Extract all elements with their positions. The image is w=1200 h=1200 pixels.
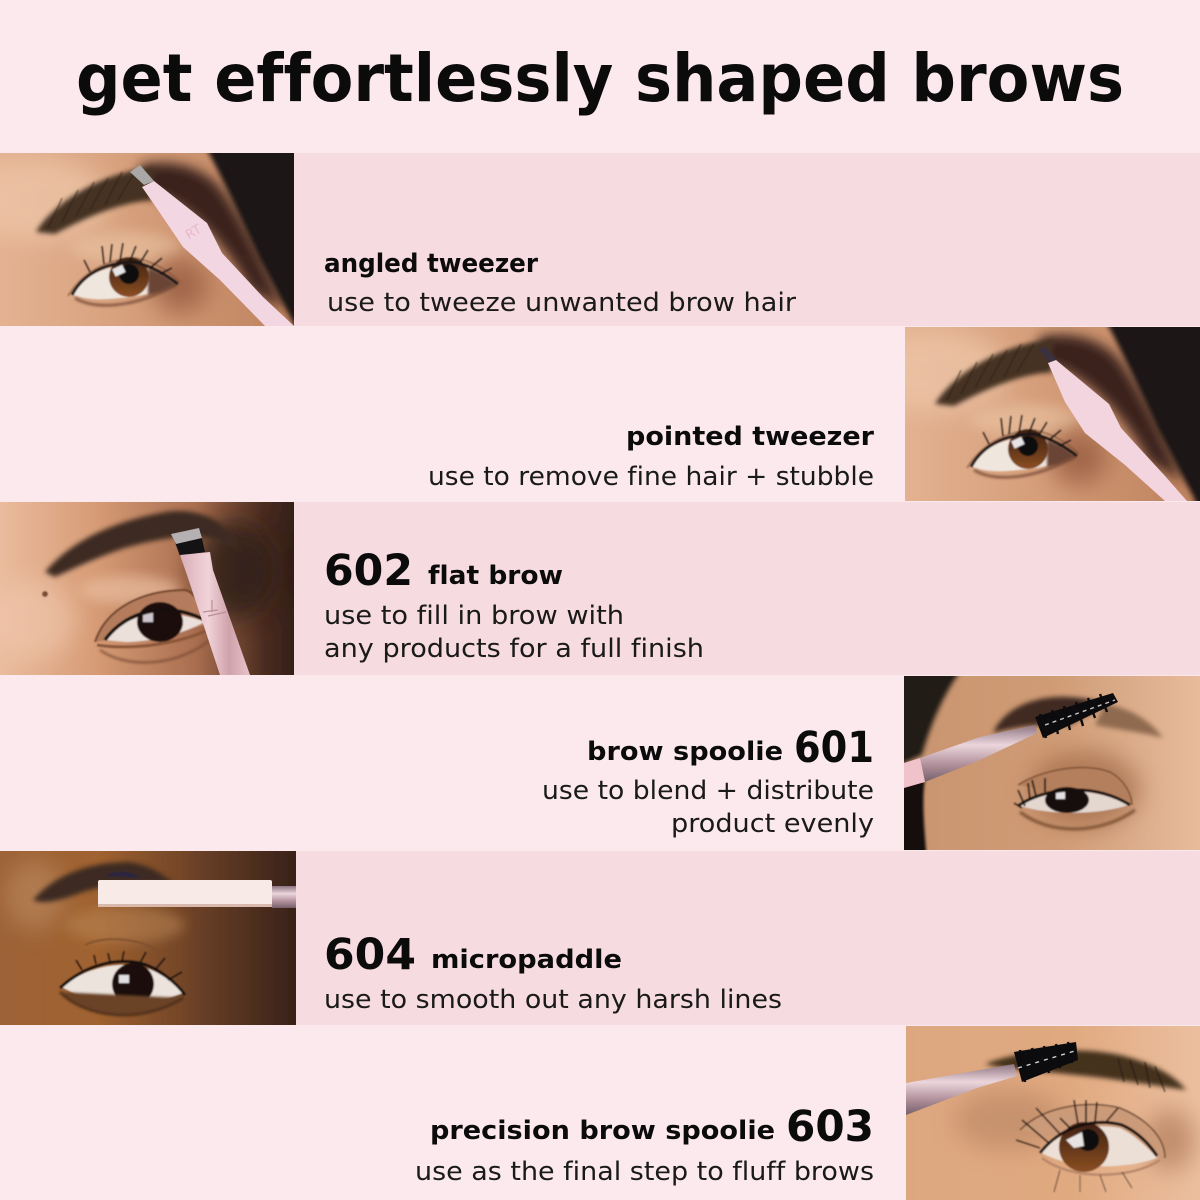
text: brow spoolie 601: 601 — [794, 723, 874, 773]
photo: eye with pointed tweezer — [905, 327, 1200, 501]
text: 604 micropaddle: use to smooth out any harsh lines — [324, 985, 782, 1015]
panel: 604 micropaddle — [0, 851, 1200, 1025]
text: 602 flat brow: 602 — [324, 546, 413, 596]
photo: eye with precision spoolie — [906, 1026, 1200, 1200]
text: 602 flat brow: flat brow — [428, 561, 563, 591]
text: angled tweezer — [324, 249, 796, 318]
text: pointed tweezer: use to remove fine hair + stubble — [428, 462, 874, 492]
text: angled tweezer: angled tweezer — [324, 249, 538, 279]
text: brow spoolie 601: product evenly — [671, 809, 874, 839]
text: 602 flat brow: any products for a full finish — [324, 634, 704, 664]
text: precision brow spoolie 603: 603 — [786, 1102, 874, 1152]
text: brow spoolie 601: brow spoolie — [587, 737, 783, 767]
text: pointed tweezer — [428, 422, 874, 492]
photo: eye with spoolie brush — [904, 676, 1200, 850]
photo: eye with flat brow brush — [0, 502, 294, 675]
panel: brow spoolie 601 — [544, 676, 1200, 850]
text: precision brow spoolie 603: use as the final step to fluff brows — [415, 1157, 874, 1187]
text: precision brow spoolie 603 — [415, 1102, 874, 1187]
text: 602 flat brow — [324, 546, 704, 664]
text: pointed tweezer: pointed tweezer — [626, 422, 874, 452]
panel: pointed tweezer — [430, 327, 1200, 501]
text: 602 flat brow: use to fill in brow with — [324, 601, 624, 631]
panel: precision brow spoolie 603 — [417, 1026, 1200, 1200]
photo: eye with micropaddle — [0, 851, 296, 1025]
text: 604 micropaddle — [324, 930, 782, 1015]
text: 604 micropaddle: micropaddle — [431, 945, 622, 975]
text: brow spoolie 601 — [542, 723, 874, 839]
text: angled tweezer: use to tweeze unwanted brow hair — [327, 288, 796, 318]
photo: eye with angled tweezer: RT — [183, 222, 205, 243]
panel: angled tweezer — [0, 153, 1200, 326]
photo: eye with angled tweezer — [0, 153, 294, 326]
panel: 602 flat brow — [0, 502, 1200, 675]
text: precision brow spoolie 603: precision brow spoolie — [430, 1116, 775, 1146]
title: get effortlessly shaped brows — [76, 40, 1124, 117]
text: brow spoolie 601: use to blend + distribute — [542, 776, 874, 806]
text: 604 micropaddle: 604 — [324, 930, 416, 980]
